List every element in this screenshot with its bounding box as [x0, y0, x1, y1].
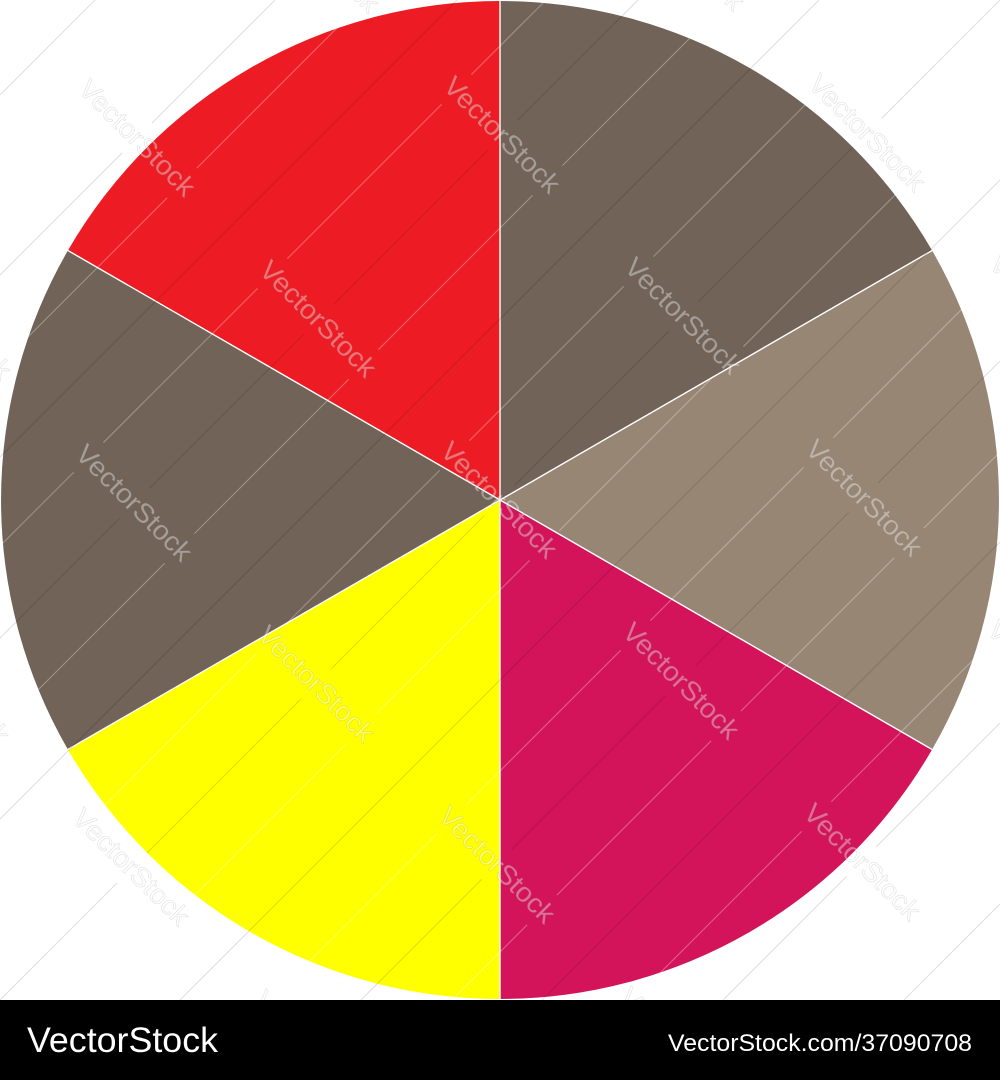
watermark: repeated VectorStock text: VectorStock — [798, 798, 927, 927]
segment: right, light brown — [500, 250, 999, 750]
footer logo text: VectorStock — [27, 1021, 219, 1060]
segment: top right, dark brown — [500, 1, 932, 500]
watermark: repeated VectorStock text: VectorStock — [617, 617, 746, 746]
watermark: repeated VectorStock text: VectorStock — [433, 801, 562, 930]
footer image id: VectorStock.com/37090708 — [668, 1030, 972, 1057]
watermark: repeated VectorStock text: VectorStock — [619, 252, 748, 381]
watermark: repeated VectorStock text: VectorStock — [438, 71, 567, 200]
segment: left, dark brown — [1, 250, 500, 750]
watermark: repeated VectorStock text: VectorStock — [73, 74, 202, 203]
watermark: repeated VectorStock text: VectorStock — [803, 69, 932, 198]
watermark: repeated VectorStock text: VectorStock — [67, 803, 196, 932]
watermark: repeated VectorStock text: VectorStock — [254, 255, 383, 384]
watermark: repeated VectorStock text: VectorStock — [435, 436, 564, 565]
segment: top left, red — [68, 1, 500, 500]
watermark: repeated VectorStock text: VectorStock — [252, 620, 381, 749]
segment dividers — [68, 1, 932, 999]
footer bar — [0, 1000, 1000, 1080]
watermark: repeated VectorStock text: VectorStock — [800, 434, 929, 563]
segment: bottom left, yellow — [68, 500, 500, 999]
segment: bottom right, crimson — [500, 500, 932, 999]
watermark: repeated VectorStock text: VectorStock — [70, 439, 199, 568]
